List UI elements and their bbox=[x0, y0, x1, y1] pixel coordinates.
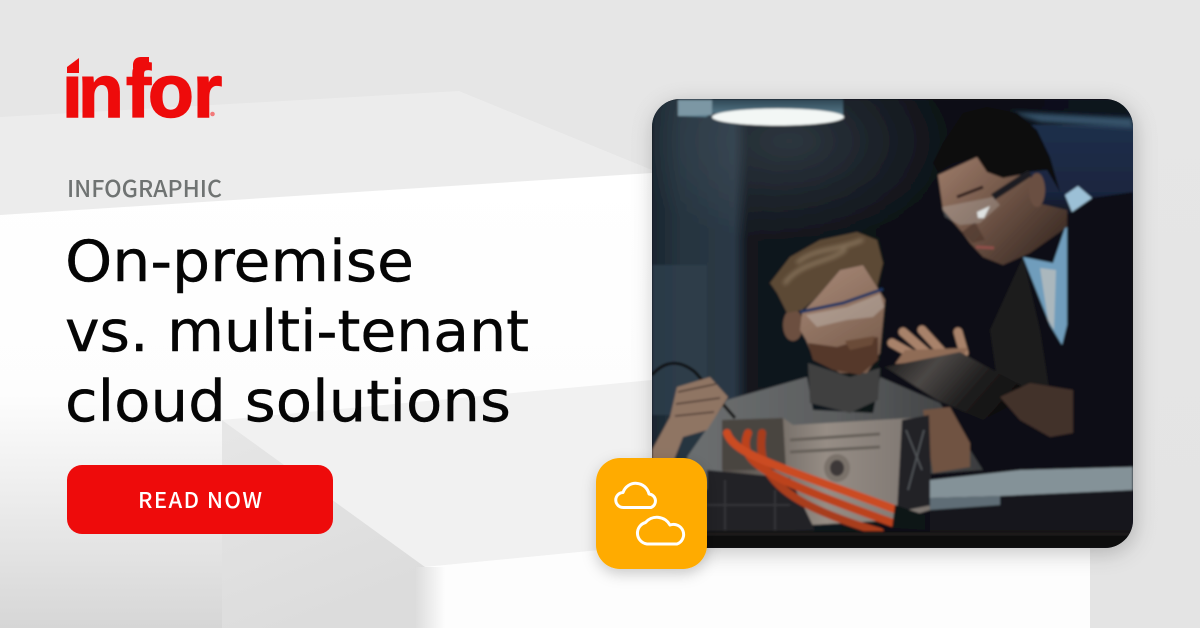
right man hair bbox=[933, 107, 1060, 192]
icon: lower cloud bbox=[637, 517, 684, 544]
left man other hand bbox=[923, 407, 970, 473]
label: infographic: INFOGRAPHIC bbox=[67, 170, 222, 204]
right man face bbox=[938, 157, 1067, 265]
right man jacket bbox=[985, 192, 1133, 480]
right man glasses bbox=[993, 173, 1030, 197]
right man shirt bbox=[1023, 222, 1067, 345]
left hand bbox=[652, 376, 730, 458]
right man sleeve bbox=[1073, 383, 1133, 437]
title bbox=[65, 229, 529, 435]
title: On-premise bbox=[65, 229, 414, 295]
button: read now bbox=[67, 465, 333, 534]
left man beard bbox=[808, 337, 878, 375]
left man hair bbox=[770, 232, 883, 313]
button: read now: READ NOW bbox=[138, 483, 262, 515]
left man ear bbox=[783, 309, 803, 341]
probe wire bbox=[652, 363, 735, 418]
hand on tablet bbox=[1000, 383, 1073, 437]
grey case bbox=[930, 467, 1133, 533]
left man glasses bbox=[806, 294, 884, 327]
left man neck bbox=[808, 363, 880, 413]
lamp bbox=[678, 99, 843, 118]
title: cloud solutions bbox=[65, 369, 511, 435]
icon: upper cloud bbox=[616, 483, 655, 508]
engine bbox=[722, 417, 930, 530]
logo: infor: infor bbox=[62, 49, 222, 133]
cable ends bbox=[892, 505, 925, 530]
left man face bbox=[800, 265, 885, 373]
cables bbox=[727, 433, 897, 532]
table bbox=[700, 531, 1133, 548]
gesturing hand bbox=[892, 330, 964, 357]
left man sweater bbox=[687, 377, 983, 490]
icon: clouds badge bbox=[596, 458, 707, 569]
photo: two engineers inspecting an engine bbox=[652, 99, 1140, 548]
title: vs. multi-tenant bbox=[65, 299, 529, 365]
tablet bbox=[885, 352, 1035, 420]
